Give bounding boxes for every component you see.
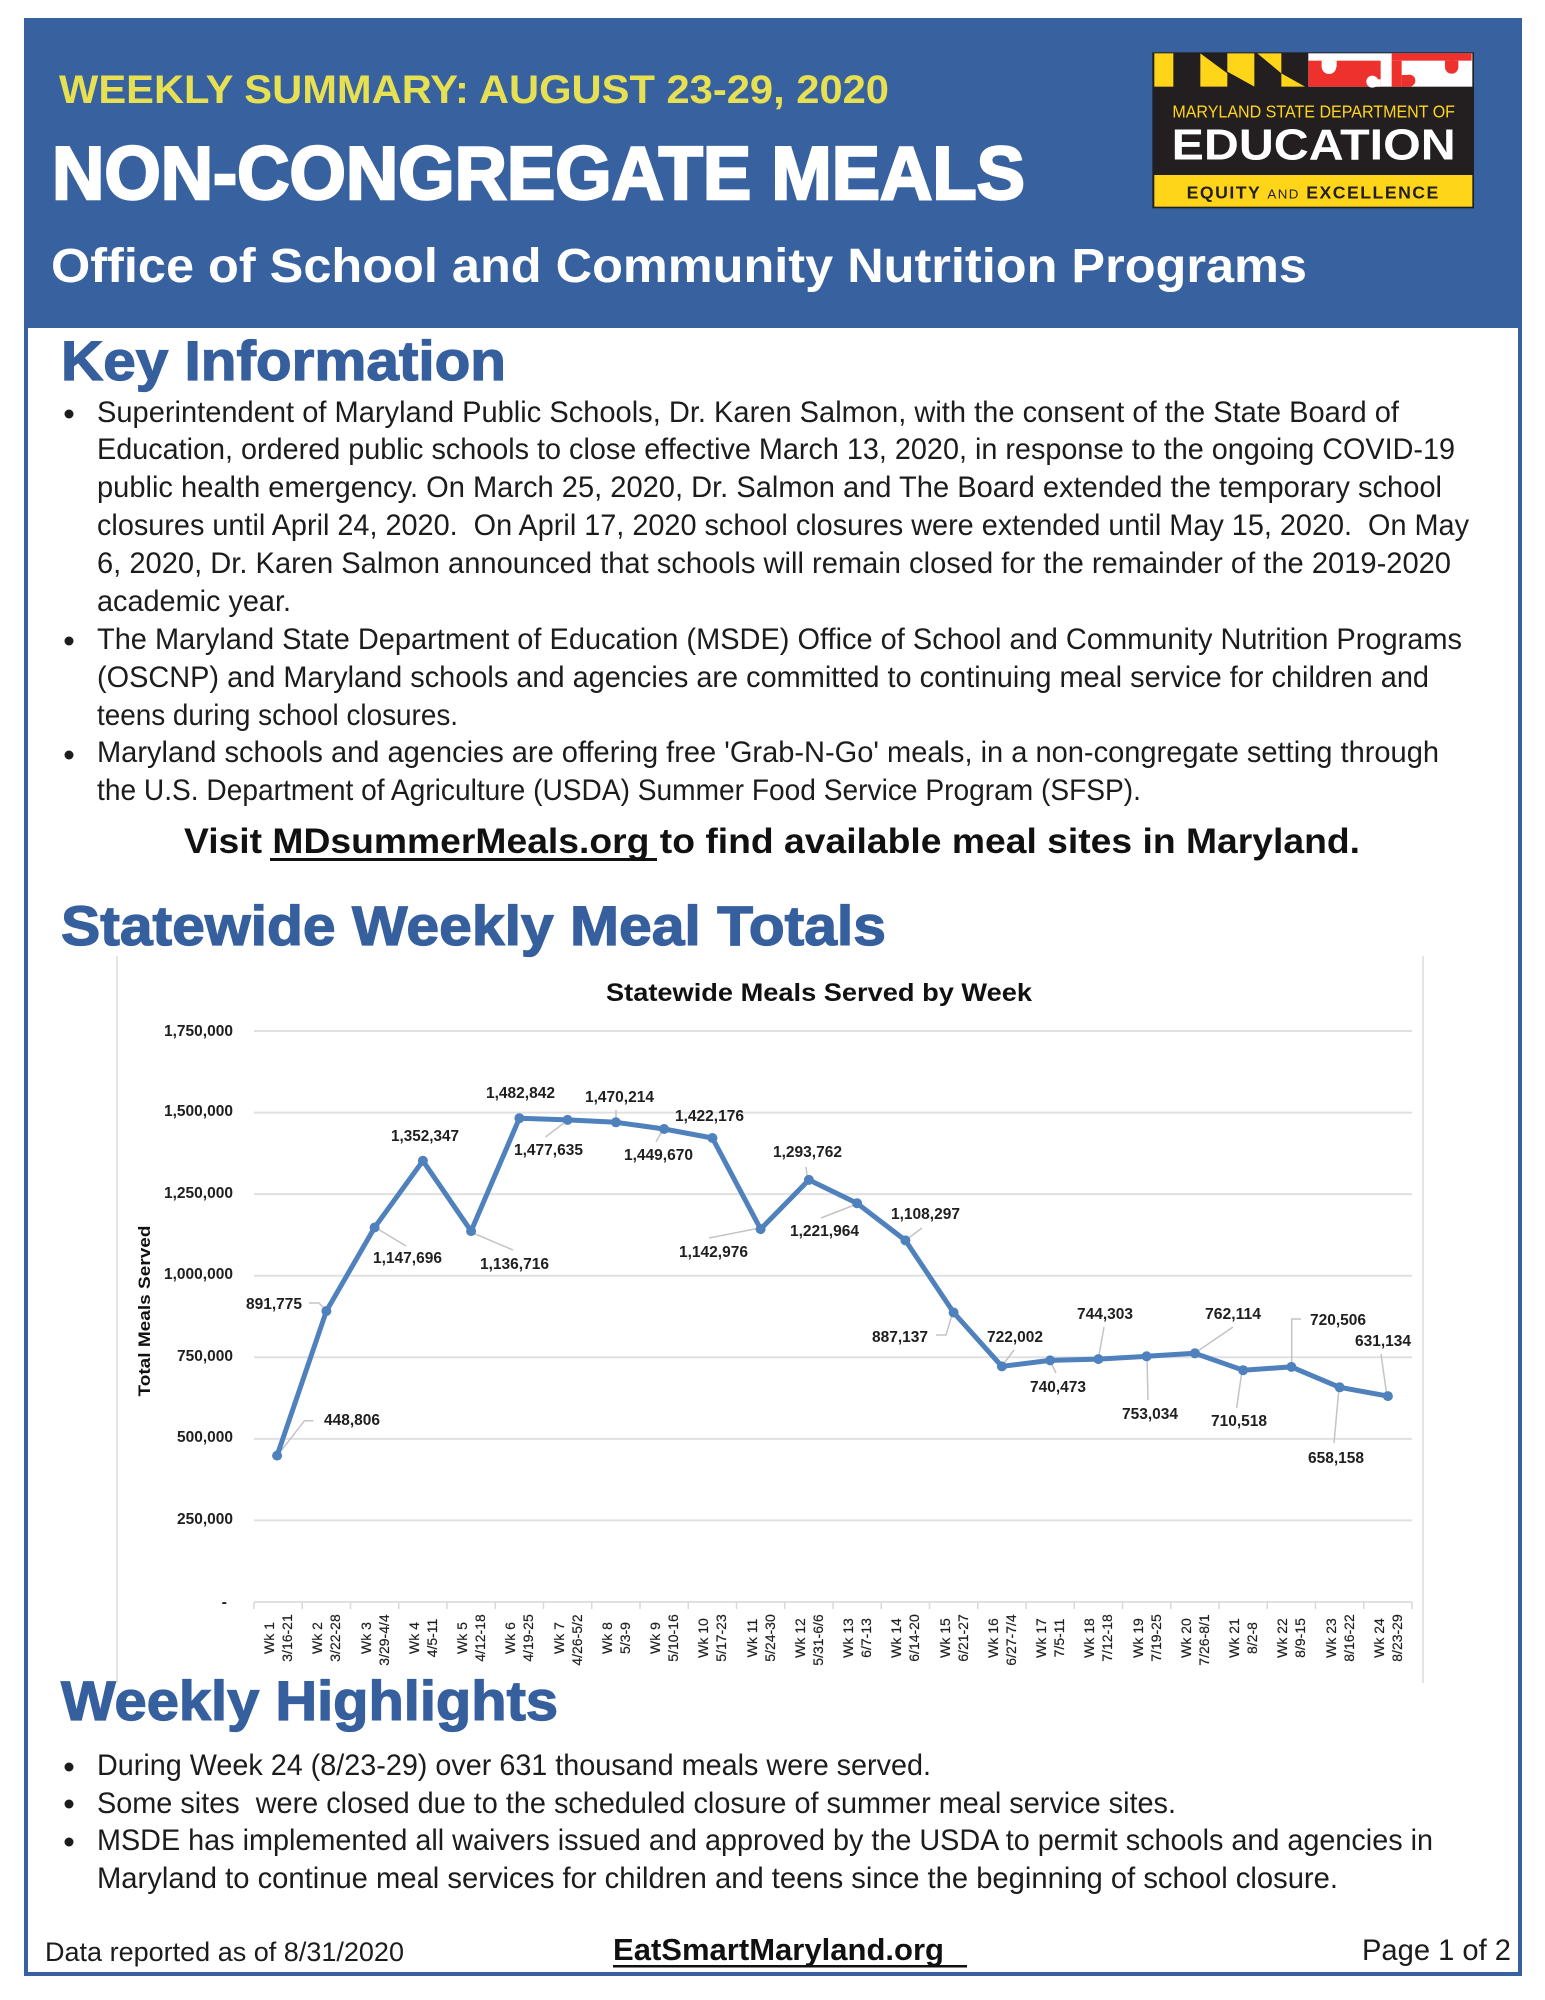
data labels: 1,221,964 [790, 1223, 859, 1240]
y axis labels: 250,000 [177, 1511, 233, 1528]
x axis labels: Wk 8 [599, 1622, 615, 1654]
heading: weekly highlights: Weekly Highlights [61, 1669, 558, 1732]
data labels: 658,158 [1308, 1450, 1364, 1467]
y axis labels: - [222, 1594, 227, 1611]
x axis labels: Wk 11 [744, 1618, 760, 1657]
data labels: 631,134 [1355, 1333, 1411, 1350]
x axis labels: 5/24-30 [762, 1614, 778, 1662]
text block: key information bullets: public health emergency. On March 25, 2020, Dr. Salmon and The Board extended the temporary school [97, 471, 1442, 504]
y axis labels: 1,500,000 [164, 1103, 233, 1120]
x axis labels: 4/26-5/2 [569, 1614, 585, 1666]
x axis labels: 5/17-23 [713, 1614, 729, 1662]
x axis labels: 6/27-7/4 [1003, 1614, 1019, 1666]
leader lines [277, 1110, 1387, 1456]
x axis labels: 4/5-11 [424, 1618, 440, 1657]
x axis labels [261, 1614, 1405, 1666]
x axis labels: 6/21-27 [955, 1614, 971, 1662]
data labels: 1,136,716 [480, 1256, 549, 1273]
data labels: 720,506 [1310, 1312, 1366, 1329]
x axis labels: Wk 7 [551, 1622, 567, 1654]
x axis labels: 7/5-11 [1051, 1618, 1067, 1657]
data labels: 1,108,297 [891, 1206, 960, 1223]
text block: weekly highlights bullets [64, 1749, 1433, 1895]
x axis labels: 8/23-29 [1389, 1614, 1405, 1662]
data labels: 887,137 [872, 1329, 928, 1346]
data labels: 448,806 [324, 1412, 380, 1429]
icon: MSDE logo: EQUITY AND EXCELLENCE [1187, 182, 1439, 202]
y axis title: Total Meals Served [135, 1226, 154, 1396]
subtitle: Office of School and Community Nutrition Programs [51, 240, 1307, 293]
x axis labels: Wk 13 [840, 1618, 856, 1658]
text block: key information bullets: the U.S. Department of Agriculture (USDA) Summer Food Service Program (SFSP). [97, 774, 1141, 807]
x axis labels: Wk 4 [406, 1622, 422, 1654]
text block: weekly highlights bullets: During Week 24 (8/23-29) over 631 thousand meals were served. [97, 1749, 931, 1782]
text block: key information bullets: The Maryland State Department of Education (MSDE) Office of School and Community Nutrition Programs [97, 623, 1462, 656]
x axis labels: Wk 18 [1081, 1618, 1097, 1658]
data labels: 1,482,842 [486, 1085, 555, 1102]
x axis labels: Wk 14 [888, 1618, 904, 1658]
y axis labels: 1,000,000 [164, 1266, 233, 1283]
x axis labels: Wk 12 [792, 1618, 808, 1658]
chart title: Statewide Meals Served by Week [606, 979, 1032, 1007]
text block: key information bullets: Maryland schools and agencies are offering free 'Grab-N-Go' meals, in a non-congregate setting through [97, 736, 1439, 769]
x axis labels: 8/9-15 [1292, 1618, 1308, 1658]
x axis labels: Wk 3 [358, 1622, 374, 1654]
x axis labels: 3/22-28 [327, 1614, 343, 1662]
x axis labels: 3/16-21 [279, 1614, 295, 1662]
x axis labels: Wk 19 [1130, 1618, 1146, 1658]
x axis labels: 4/19-25 [520, 1614, 536, 1662]
x axis labels: 5/10-16 [665, 1614, 681, 1662]
data labels: 753,034 [1122, 1406, 1178, 1423]
text block: key information bullets: Superintendent of Maryland Public Schools, Dr. Karen Salmon, with the consent of the State Board of [97, 396, 1400, 429]
x axis labels: Wk 20 [1178, 1618, 1194, 1658]
data line [272, 1113, 1393, 1461]
text block: weekly highlights bullets: Some sites were closed due to the scheduled closure of summer meal service sites. [97, 1787, 1176, 1820]
text block: key information bullets: (OSCNP) and Maryland schools and agencies are committed to continuing meal service for children and [97, 661, 1429, 694]
y axis labels [164, 1023, 233, 1611]
x axis labels: Wk 16 [985, 1618, 1001, 1658]
x axis labels: 4/12-18 [472, 1614, 488, 1662]
y axis labels: 500,000 [177, 1429, 233, 1446]
callout: visit website: Visit MDsummerMeals.org to find available meal sites in Maryland. [184, 822, 1360, 861]
x axis labels: Wk 2 [309, 1622, 325, 1654]
x axis labels: 7/12-18 [1099, 1614, 1115, 1662]
heading: statewide weekly meal totals: Statewide Weekly Meal Totals [61, 894, 886, 957]
data labels: 1,352,347 [391, 1128, 459, 1145]
text block: key information bullets: academic year. [97, 585, 291, 618]
data labels: 740,473 [1030, 1379, 1086, 1396]
line chart: statewide meals served by week [117, 956, 1423, 1683]
x axis labels: 7/19-25 [1148, 1614, 1164, 1662]
data labels: 744,303 [1077, 1306, 1133, 1323]
x axis labels: 7/26-8/1 [1196, 1614, 1212, 1666]
x axis labels: Wk 6 [502, 1622, 518, 1654]
x axis labels: 6/7-13 [858, 1618, 874, 1658]
text block: key information bullets: closures until April 24, 2020. On April 17, 2020 school closures were extended until May 15, 2020. On May [97, 509, 1469, 542]
data labels: 1,422,176 [675, 1108, 744, 1125]
x axis labels: Wk 1 [261, 1622, 277, 1654]
x axis labels: Wk 5 [454, 1622, 470, 1654]
y axis labels: 1,250,000 [164, 1185, 233, 1202]
footer [45, 1932, 1511, 1968]
y axis labels: 750,000 [177, 1348, 233, 1365]
text block: weekly highlights bullets: Maryland to continue meal services for children and teens since the beginning of school closure. [97, 1862, 1338, 1895]
x axis labels: 8/16-22 [1341, 1614, 1357, 1662]
data labels: 1,147,696 [373, 1250, 442, 1267]
x axis labels: Wk 17 [1033, 1618, 1049, 1658]
text block: key information bullets: Education, ordered public schools to close effective March 13, 2020, in response to the ongoing COVID-19 [97, 433, 1455, 466]
x axis labels: 5/3-9 [617, 1622, 633, 1654]
data labels: 1,470,214 [585, 1089, 654, 1106]
x axis labels: 3/29-4/4 [376, 1614, 392, 1666]
icon: MSDE logo [1152, 52, 1474, 208]
x axis labels: 5/31-6/6 [810, 1614, 826, 1666]
data labels: 1,293,762 [773, 1144, 842, 1161]
data labels: 722,002 [987, 1329, 1043, 1346]
data labels: 762,114 [1205, 1306, 1261, 1323]
y axis labels: 1,750,000 [164, 1023, 233, 1040]
heading: key information: Key Information [61, 329, 506, 392]
x axis labels: Wk 15 [937, 1618, 953, 1658]
footer: data reported date: Data reported as of 8/31/2020 [45, 1937, 404, 1967]
data labels: 710,518 [1211, 1413, 1267, 1430]
text block: weekly highlights bullets: MSDE has implemented all waivers issued and approved by the USDA to permit schools and agencies in [97, 1824, 1433, 1857]
icon: MSDE logo: MARYLAND STATE DEPARTMENT OF [1172, 102, 1455, 122]
x axis labels: Wk 22 [1274, 1618, 1290, 1658]
text block: key information bullets [64, 396, 1469, 807]
data labels: 1,449,670 [624, 1147, 693, 1164]
x axis labels: Wk 23 [1323, 1618, 1339, 1658]
text block: key information bullets: 6, 2020, Dr. Karen Salmon announced that schools will remain closed for the remainder of the 2019-2020 [97, 547, 1451, 580]
footer: page number: Page 1 of 2 [1362, 1934, 1511, 1967]
icon: MSDE logo: EDUCATION [1172, 121, 1456, 169]
x axis labels: Wk 9 [647, 1622, 663, 1654]
x axis labels: Wk 21 [1226, 1618, 1242, 1658]
x axis labels: 8/2-8 [1244, 1622, 1260, 1654]
data labels [246, 1085, 1411, 1467]
data labels: 891,775 [246, 1296, 302, 1313]
text block: key information bullets: teens during school closures. [97, 699, 458, 732]
data labels: 1,477,635 [514, 1142, 583, 1159]
x axis labels: Wk 10 [695, 1618, 711, 1658]
data labels: 1,142,976 [679, 1244, 748, 1261]
x axis labels: 6/14-20 [906, 1614, 922, 1662]
title: NON-CONGREGATE MEALS [52, 131, 1025, 215]
text: weekly summary date: WEEKLY SUMMARY: AUGUST 23-29, 2020 [59, 68, 889, 112]
footer: website link: EatSmartMaryland.org [613, 1932, 944, 1967]
x axis labels: Wk 24 [1371, 1618, 1387, 1658]
panel: header banner [24, 18, 1522, 328]
